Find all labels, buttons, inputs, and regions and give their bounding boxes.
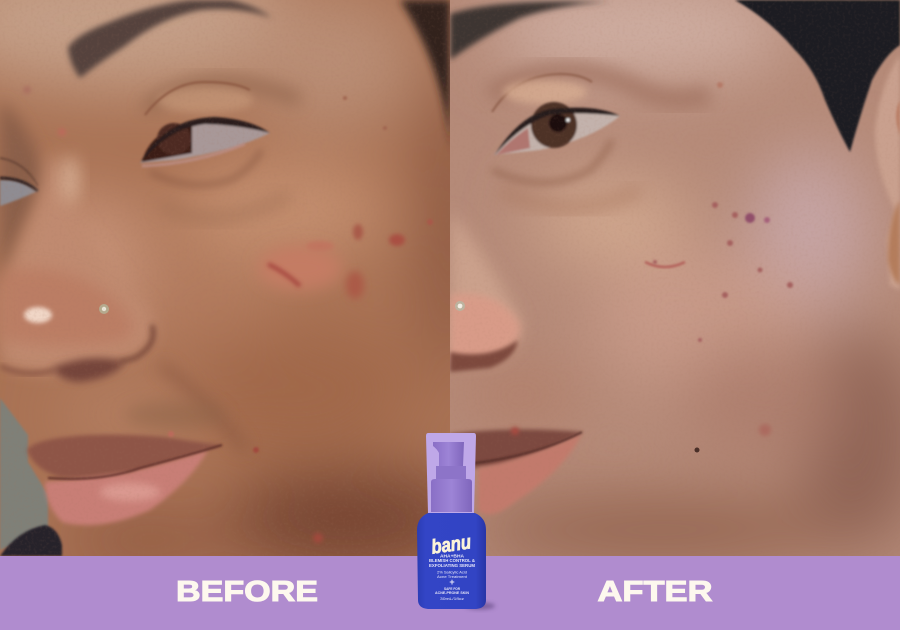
acne patch <box>23 86 433 543</box>
skin tones <box>0 0 476 570</box>
product text: Acne Treatment <box>437 574 468 579</box>
nose stud <box>99 304 109 314</box>
skin grain <box>455 1 898 130</box>
clear cap <box>426 433 476 513</box>
nasolabial fold <box>162 364 241 444</box>
eye <box>494 102 620 156</box>
eyebrow <box>450 1 610 60</box>
product text: ACNE-PRONE SKIN <box>435 591 469 595</box>
heading: after label: AFTER <box>598 576 713 608</box>
pump <box>431 442 472 512</box>
skin tones <box>460 0 900 560</box>
panel: before photo <box>0 0 476 570</box>
under-eye bag <box>492 140 612 182</box>
product text: 30mL/1floz <box>440 596 464 601</box>
banner: purple footer <box>0 556 900 630</box>
heading: before label: BEFORE <box>176 576 318 608</box>
left eye and shadow <box>0 104 44 270</box>
eye crease <box>492 74 592 112</box>
hair at top right <box>400 0 450 150</box>
lips <box>27 435 222 525</box>
brow bone and eye socket shadow <box>145 82 300 110</box>
ear <box>875 55 900 290</box>
bottle shadow <box>465 602 495 610</box>
product logo: banu <box>430 531 473 559</box>
eye <box>140 117 270 166</box>
product text: BLEMISH CONTROL & <box>429 558 476 563</box>
product text: + <box>449 577 455 587</box>
nose stud <box>455 301 465 311</box>
eyebrow <box>68 0 272 78</box>
bottle body <box>417 513 486 609</box>
nose <box>0 150 153 382</box>
dark clothing <box>0 525 62 556</box>
lips <box>450 429 582 514</box>
grey wall <box>0 398 48 550</box>
product text: EXFOLIATING SERUM <box>429 563 475 568</box>
skin grain <box>0 0 450 556</box>
mustache shadow <box>130 401 208 430</box>
icon: serum bottle <box>417 433 495 610</box>
panel: after photo <box>450 0 900 560</box>
brow bone shadow <box>490 71 710 99</box>
product text: AHA+BHA <box>440 554 465 560</box>
nose <box>450 210 520 372</box>
hair <box>735 0 900 152</box>
acne marks <box>511 82 793 452</box>
product text: SAFE FOR <box>444 587 460 591</box>
under-eye bag <box>150 150 262 185</box>
product text: 2% Salicylic Acid <box>437 570 467 574</box>
product text <box>429 554 476 601</box>
